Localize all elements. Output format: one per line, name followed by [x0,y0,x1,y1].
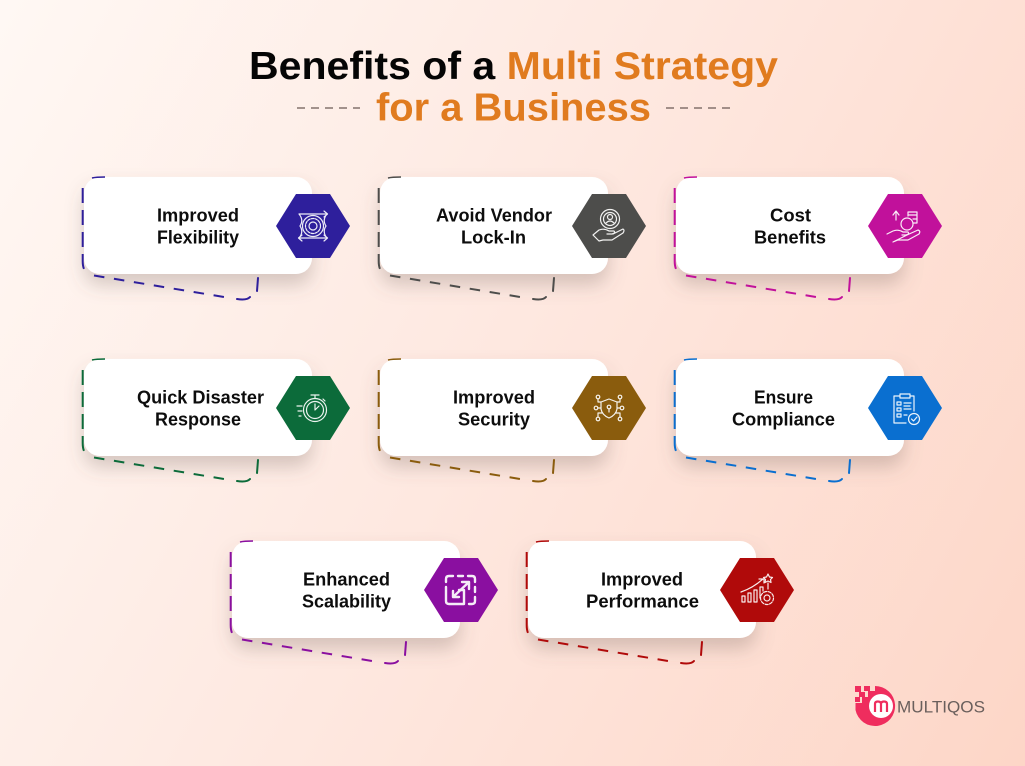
card: Enhanced Scalability: Scalability [302,592,391,612]
card: Quick Disaster Response [83,359,350,481]
logo: MultiQoS: MULTIQOS [897,698,985,716]
card: Ensure Compliance: Ensure [754,388,813,408]
card: Improved Performance: Performance [586,592,699,612]
card: Quick Disaster Response: Quick Disaster [137,388,264,408]
hexagon icon: checklist [868,376,942,440]
card: Cost Benefits: Cost [770,206,811,226]
card: Improved Security: Security [458,410,530,430]
card: Avoid Vendor Lock-In: Lock-In [461,228,526,248]
title: Benefits of a Multi Strategy [249,45,778,88]
title: for a Business [376,86,651,130]
logo: MultiQoS [855,686,985,726]
hexagon icon: shield network [572,376,646,440]
card: Improved Performance [527,541,794,663]
card: Cost Benefits: Benefits [754,228,826,248]
hexagon icon: coins in hand [868,194,942,258]
card: Enhanced Scalability: Enhanced [303,570,390,590]
title [249,45,778,130]
card: Improved Security: Improved [453,388,535,408]
card: Quick Disaster Response: Response [155,410,241,430]
card: Ensure Compliance: Compliance [732,410,835,430]
card: Avoid Vendor Lock-In: Avoid Vendor [436,206,552,226]
logo mark [855,686,895,726]
card: Improved Flexibility [83,177,350,299]
card: Improved Security [379,359,646,481]
card: Improved Flexibility: Flexibility [157,228,239,248]
card: Enhanced Scalability [231,541,498,663]
card: Improved Performance: Improved [601,570,683,590]
hexagon icon: stopwatch [276,376,350,440]
hexagon icon: vendor in hand [572,194,646,258]
hexagon icon: growth chart with gear [720,558,794,622]
card: Cost Benefits [675,177,942,299]
hexagon icon: scale arrow [424,558,498,622]
card: Ensure Compliance [675,359,942,481]
card: Avoid Vendor Lock-In [379,177,646,299]
hexagon icon: flexibility [276,194,350,258]
card: Improved Flexibility: Improved [157,206,239,226]
